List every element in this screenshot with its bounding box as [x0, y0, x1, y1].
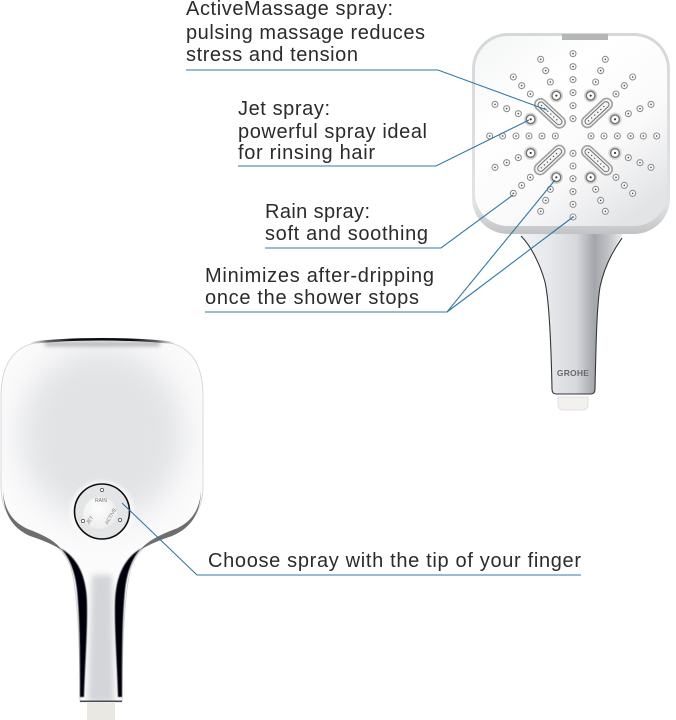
selector marks — [100, 488, 104, 492]
callout text: for rinsing hair — [238, 142, 375, 164]
hose connector — [558, 397, 588, 410]
top dark edge — [30, 339, 175, 343]
callout: Rain spray — [265, 195, 513, 248]
shower head face — [475, 36, 667, 226]
front shower handle — [472, 33, 670, 410]
jet label: JET — [85, 515, 95, 526]
nozzles — [487, 51, 660, 220]
dark ring — [74, 484, 130, 539]
callout text: pulsing massage reduces — [186, 22, 425, 44]
callout text: once the shower stops — [205, 287, 419, 309]
rear shower handle — [1, 339, 203, 720]
hose connector — [87, 703, 115, 720]
handle edge lines — [521, 236, 622, 394]
lower head edge shadow right — [140, 490, 201, 550]
leader line — [265, 195, 513, 248]
selector button — [70, 481, 134, 545]
handle body — [518, 232, 624, 394]
handle centre grey — [88, 575, 114, 702]
callout text: Rain spray: — [265, 201, 370, 223]
callout text: Minimizes after-dripping — [205, 265, 434, 287]
callout text: stress and tension — [186, 44, 358, 66]
handle dark strip left — [60, 548, 87, 697]
callout: Jet spray — [238, 98, 529, 166]
head centre grey — [20, 347, 184, 523]
handle dark strip right — [115, 548, 142, 697]
callout text: powerful spray ideal — [238, 121, 427, 143]
rear body outline — [1, 339, 203, 702]
callout: ActiveMassage spray — [186, 0, 547, 110]
rain label: RAIN — [95, 498, 107, 504]
leader line — [186, 70, 547, 110]
lower head edge shadow left — [3, 490, 62, 550]
active label: ACTIVE — [104, 507, 119, 526]
leader line — [238, 120, 529, 166]
knob — [83, 497, 117, 531]
callout text: soft and soothing — [265, 223, 428, 245]
callout: choose spray — [122, 503, 581, 575]
leader line — [122, 503, 581, 575]
leader lines — [205, 180, 573, 312]
callout text: Jet spray: — [238, 98, 330, 120]
body shading — [20, 342, 184, 702]
GROHE logo: GROHE — [557, 368, 589, 378]
top slot — [562, 34, 608, 40]
outer halo — [70, 481, 134, 545]
handle base — [80, 700, 122, 702]
upper edge shade — [45, 342, 160, 346]
callout: after-dripping — [205, 180, 573, 312]
shower head rim — [472, 33, 670, 234]
callout text: Choose spray with the tip of your finger — [208, 550, 581, 572]
